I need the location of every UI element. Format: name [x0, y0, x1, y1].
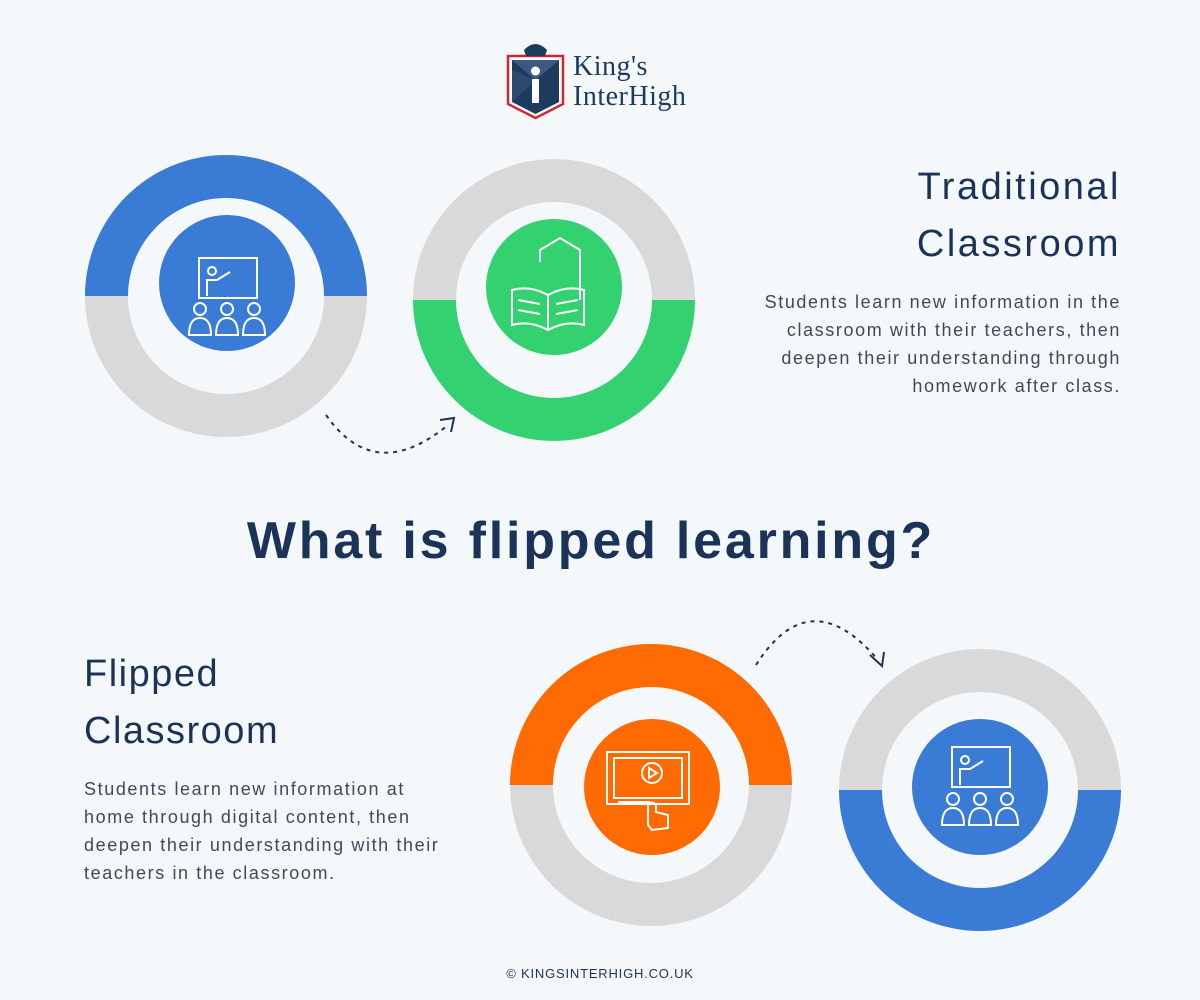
text: flipped description: teachers in the classroom. [84, 863, 336, 883]
text: flipped description: deepen their understanding with their [84, 835, 439, 855]
text: traditional description: classroom with their teachers, then [787, 320, 1121, 340]
heading: Flipped Classroom [84, 653, 279, 752]
logo [508, 44, 686, 118]
text: traditional description [765, 292, 1121, 396]
arrow: ring 3 to ring 4 [756, 621, 884, 666]
heading: Flipped Classroom: Classroom [84, 710, 279, 752]
icon: video [607, 752, 689, 830]
heading: Traditional Classroom: Traditional [917, 166, 1121, 208]
icon: book and school [512, 238, 584, 330]
icon: teacher [942, 747, 1018, 825]
arrow: ring 1 to ring 2 [326, 415, 454, 453]
icon: teacher [189, 258, 265, 335]
footer: © KINGSINTERHIGH.CO.UK [506, 966, 694, 981]
heading: Flipped Classroom: Flipped [84, 653, 219, 695]
text: traditional description: Students learn new information in the [765, 292, 1121, 312]
logo: King's [573, 51, 648, 82]
title: What is flipped learning? [247, 512, 935, 570]
text: traditional description: homework after class. [912, 376, 1121, 396]
text: traditional description: deepen their understanding through [781, 348, 1121, 368]
ring 3: digital content (orange top) [510, 644, 792, 926]
heading: Traditional Classroom [917, 166, 1121, 265]
ring 4: classroom (blue bottom) [839, 649, 1121, 931]
ring 2: homework (green bottom) [413, 159, 695, 441]
text: flipped description: home through digital content, then [84, 807, 411, 827]
heading: Traditional Classroom: Classroom [917, 223, 1121, 265]
text: flipped description [84, 779, 439, 883]
logo: InterHigh [573, 81, 686, 112]
text: flipped description: Students learn new information at [84, 779, 405, 799]
ring 1: traditional class (blue top) [85, 155, 367, 437]
